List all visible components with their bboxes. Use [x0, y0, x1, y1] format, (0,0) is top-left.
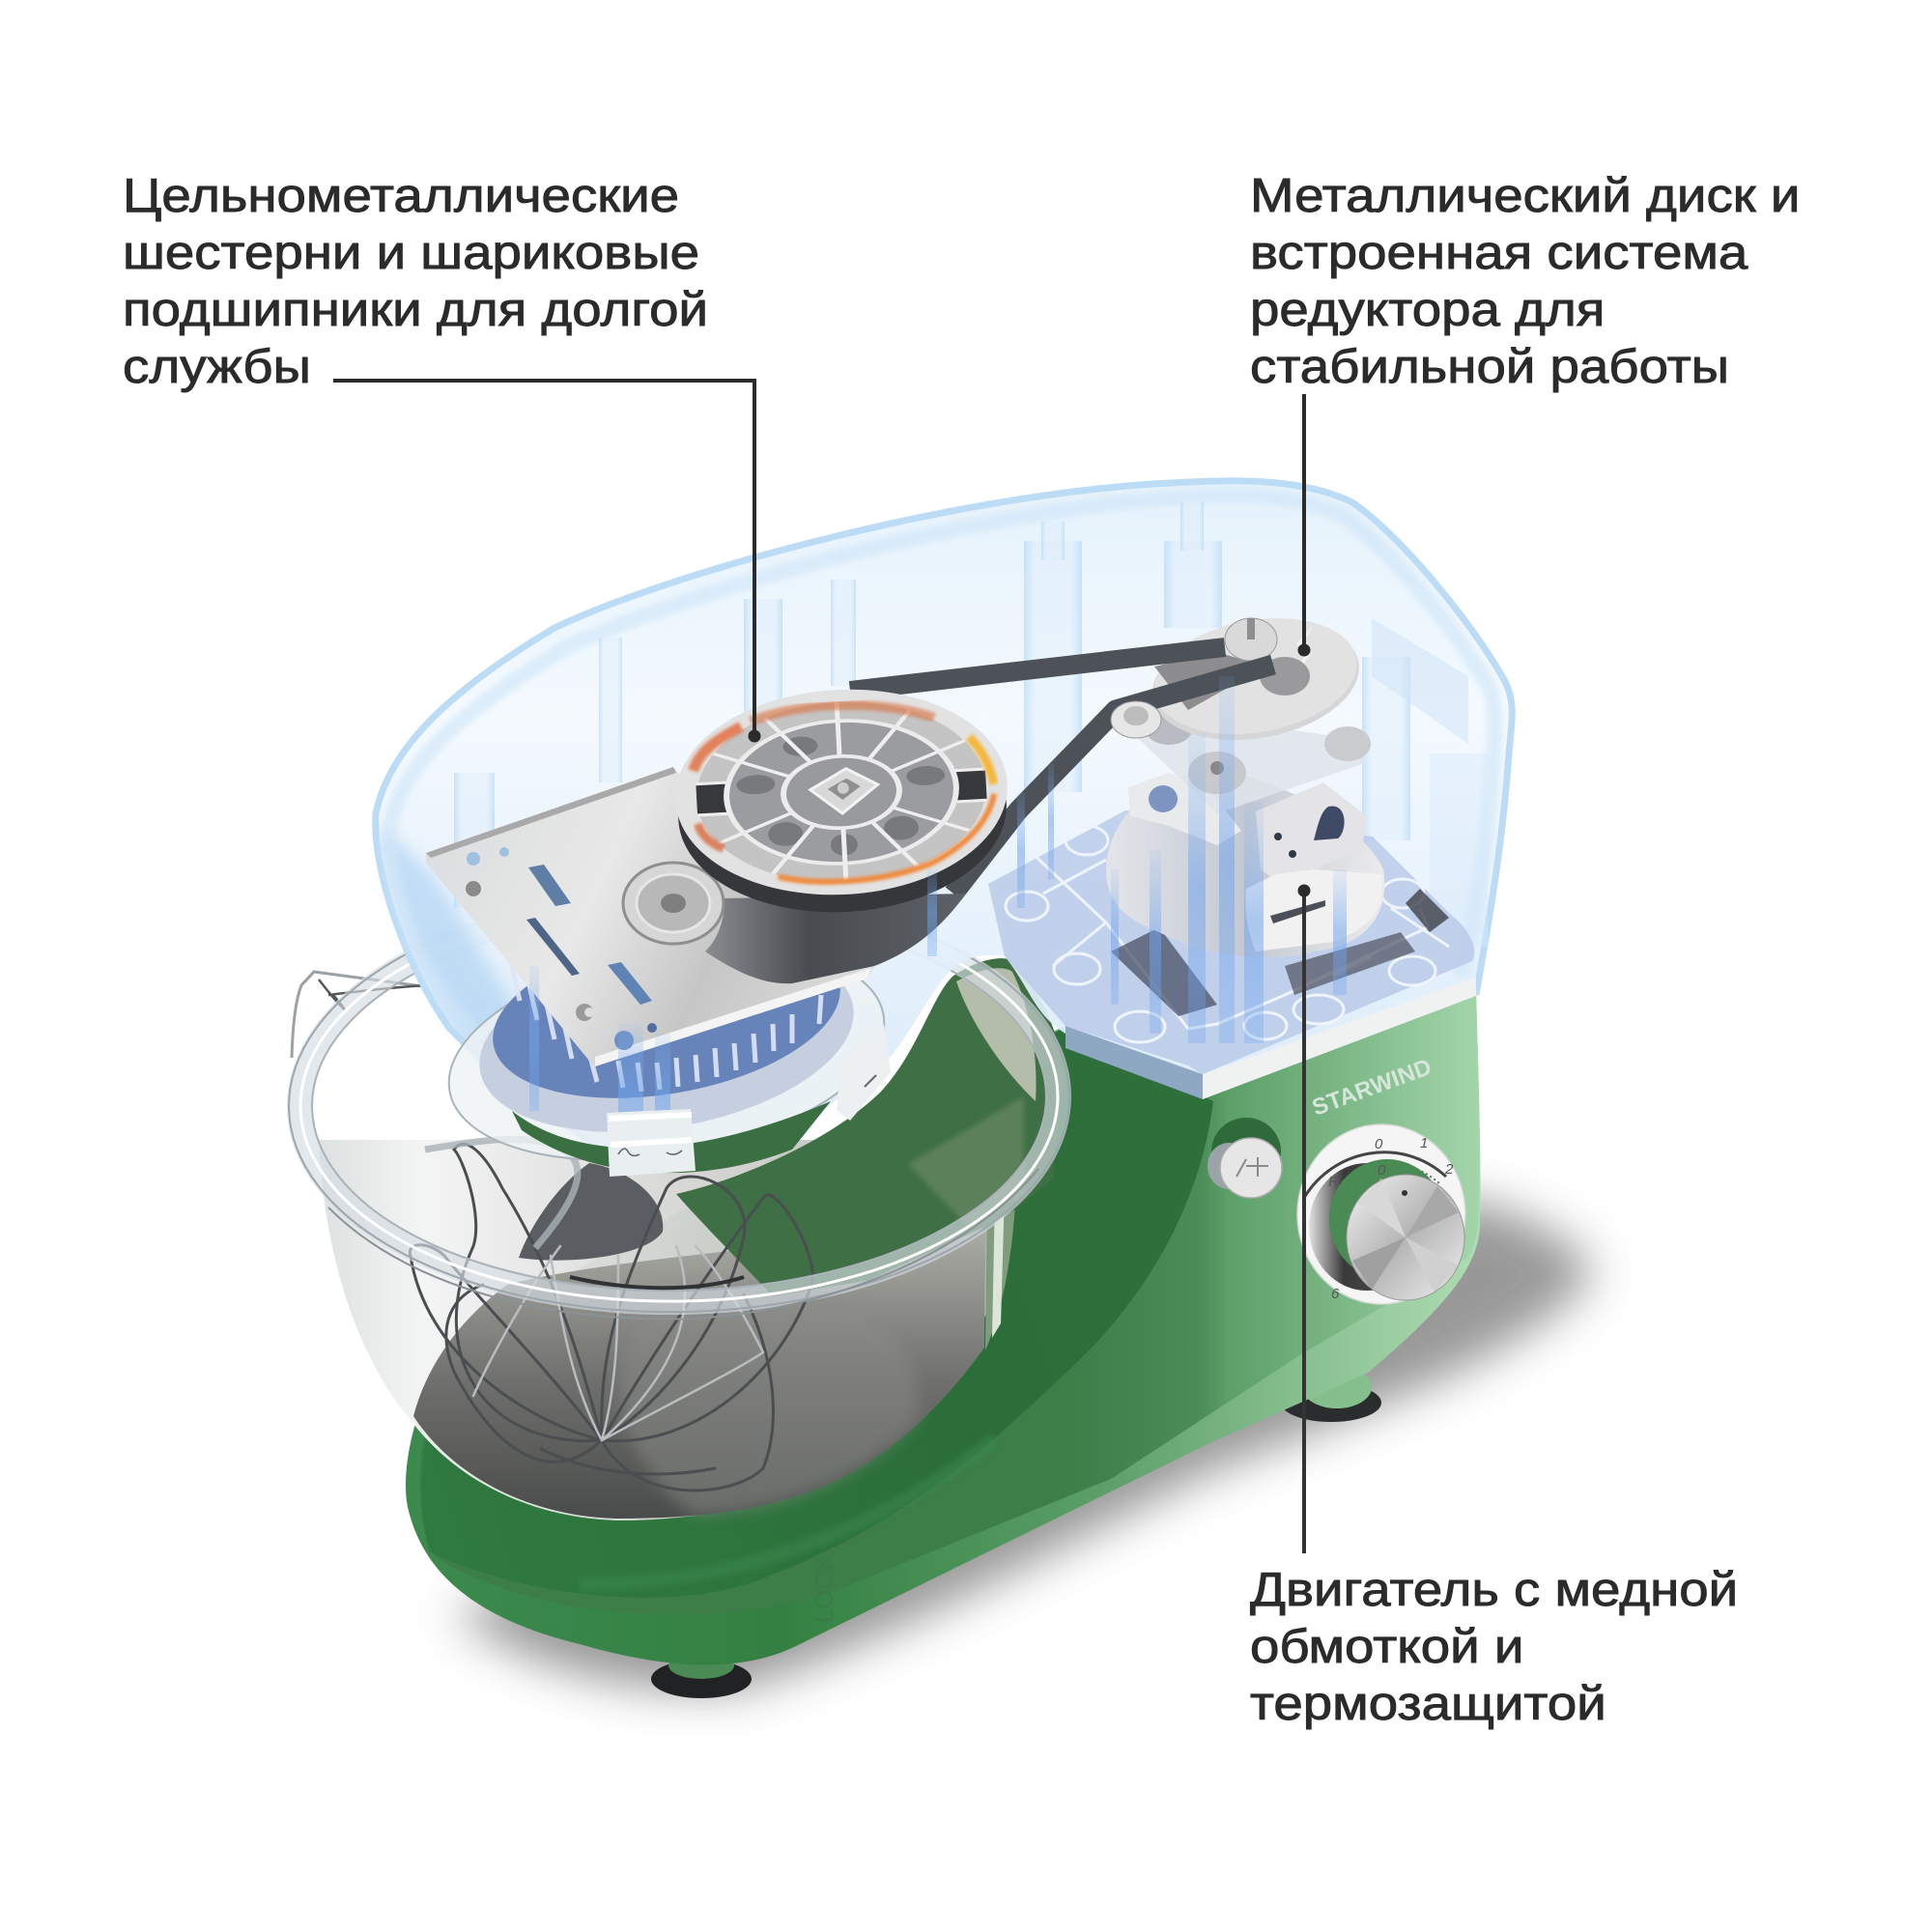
- lid notch: [425, 1139, 578, 1248]
- label: metal gears: подшипники для долгой: [123, 284, 708, 336]
- brand logo: STARWIND: [1309, 1054, 1435, 1122]
- speed dial knob: [1297, 1124, 1465, 1304]
- gear rim: [670, 681, 1012, 903]
- drive belt: [850, 647, 1273, 894]
- metal gear: [670, 681, 1013, 921]
- motor compartment: [988, 603, 1476, 1099]
- spokes: [692, 695, 991, 890]
- bowl clip: front: [607, 1109, 696, 1177]
- label: metal disc: [1250, 170, 1800, 393]
- label: metal disc: стабильной работы: [1250, 341, 1729, 393]
- leader line: gears: [333, 381, 761, 742]
- swoosh highlight: [580, 1439, 995, 1584]
- leader line: motor: [1298, 885, 1310, 1553]
- label: metal gears: службы: [123, 341, 311, 393]
- label: motor: обмоткой и: [1250, 1621, 1523, 1673]
- bowl inner highlight: [620, 1281, 919, 1517]
- gear skirt: [673, 702, 1011, 921]
- label: motor: термозащитой: [1250, 1678, 1606, 1730]
- top disc: [1143, 605, 1369, 755]
- beater hub: [519, 1163, 663, 1261]
- pulley: [1225, 618, 1277, 661]
- dial numbers: 0: [1375, 1136, 1383, 1152]
- floor partitions: [1006, 826, 1449, 1042]
- foot: right: [1281, 1366, 1381, 1422]
- base and tower silhouette: [406, 985, 1481, 1664]
- idler screw: [1111, 701, 1161, 738]
- middle ring: [752, 734, 931, 850]
- motor bracket right: [1256, 782, 1367, 894]
- label: motor: Двигатель с медной: [1250, 1564, 1738, 1616]
- dark side bars: [696, 782, 727, 815]
- green stripe reflection: [985, 1180, 1016, 1350]
- label: metal gears: Цельнометаллические: [123, 170, 679, 222]
- label: metal gears: шестерни и шариковые: [123, 227, 699, 279]
- foot: left: [651, 1652, 752, 1698]
- knob cylinder: [1309, 1163, 1425, 1291]
- drop shadow: [454, 1198, 1594, 1691]
- side strip left: [1065, 1026, 1203, 1099]
- blue light streaks: [529, 676, 1347, 1159]
- bearing: [623, 863, 724, 944]
- screw: [584, 1008, 594, 1017]
- knob cap: [1347, 1175, 1464, 1300]
- mixer body: [406, 985, 1481, 1664]
- dial numbers: 1: [1420, 1135, 1428, 1151]
- label: metal disc: редуктора для: [1250, 284, 1605, 336]
- winding plate: [1245, 869, 1382, 952]
- label: metal disc: Металлический диск и: [1250, 170, 1800, 222]
- outer ring: [707, 704, 976, 880]
- rim bands: [296, 894, 1063, 1309]
- transparent blue cover: [376, 481, 1512, 1150]
- side strip front: [1203, 978, 1476, 1099]
- tower front: [419, 990, 1480, 1614]
- hub: [810, 767, 879, 815]
- compartment floor: [988, 810, 1474, 1074]
- lid pour chute: [292, 972, 430, 1058]
- lock mark: LOCK: [810, 1554, 838, 1623]
- tilt button: [1208, 1118, 1282, 1198]
- gearbox housing under plate: [432, 906, 901, 1191]
- motor block: [1106, 772, 1384, 957]
- label: motor: [1250, 1564, 1738, 1730]
- cover outline: [376, 481, 1512, 1150]
- whisk: [410, 1144, 812, 1491]
- bowl body: [319, 1140, 1020, 1520]
- dial numbers: 0: [1378, 1162, 1386, 1179]
- housing: [465, 918, 868, 1159]
- body seen through glass: [676, 958, 1063, 1296]
- cone under gear: [705, 894, 966, 983]
- dial numbers: 6: [1331, 1286, 1340, 1302]
- dark swoosh and base top: [422, 1029, 1213, 1598]
- dark interior: [413, 1217, 985, 1519]
- cover lower-left tint: [379, 831, 618, 1150]
- dial numbers: R: [1328, 1174, 1339, 1190]
- dark electronics: [1111, 927, 1217, 1016]
- upper bracket: [1122, 710, 1365, 813]
- bowl clip: right: [837, 1024, 891, 1121]
- glass bowl: [319, 958, 1063, 1520]
- leader line: disc: [1298, 394, 1310, 657]
- inner pillars: [454, 502, 1488, 947]
- chamber shading: [734, 729, 949, 861]
- bowl rim and lid: [285, 884, 1073, 1319]
- copper glow: [750, 700, 934, 727]
- reflection panel: [956, 968, 1037, 1101]
- flange: [432, 915, 901, 1191]
- dial numbers: 2: [1444, 1161, 1454, 1178]
- motor bracket left: [1128, 773, 1241, 845]
- gear teeth: [512, 966, 821, 1092]
- label: metal disc: встроенная система: [1250, 227, 1747, 279]
- label: metal gears: [123, 170, 708, 393]
- steel mounting plate: [426, 767, 966, 1066]
- dial numbers: [1328, 1135, 1454, 1302]
